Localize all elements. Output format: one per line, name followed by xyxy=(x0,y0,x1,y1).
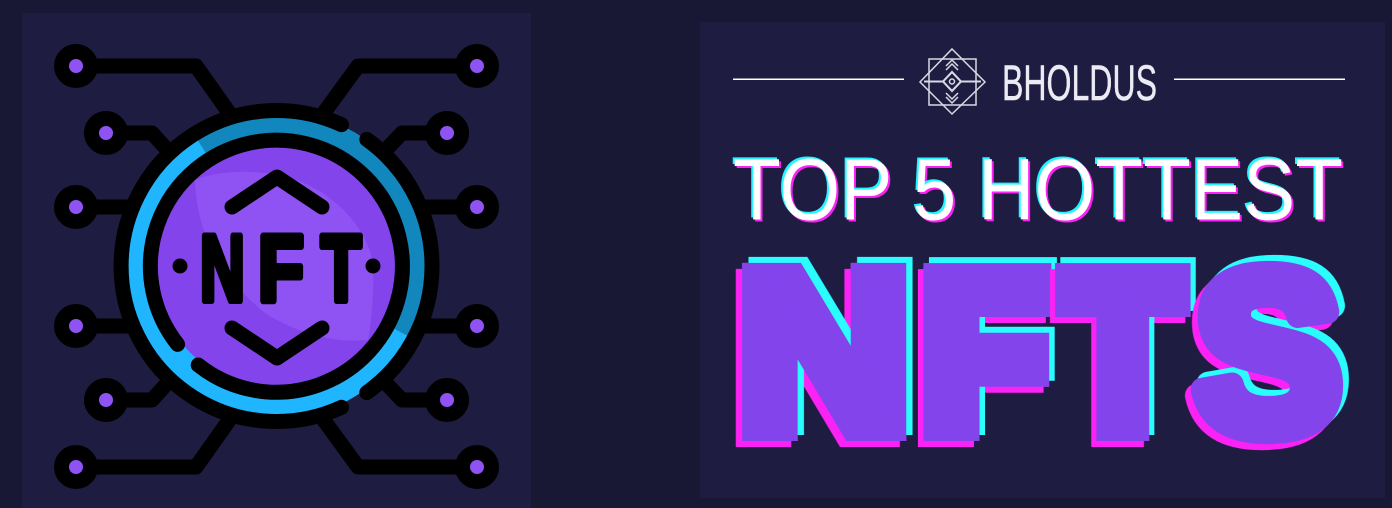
divider line left xyxy=(733,78,904,80)
heading: top 5 hottest: TOP 5 HOTTEST xyxy=(733,142,1343,238)
blue ring shaded part xyxy=(201,123,420,333)
circuit wires xyxy=(76,66,477,467)
brand name: BHOLDUS xyxy=(1002,55,1157,111)
letter N: N xyxy=(739,227,909,477)
panel: right title background xyxy=(700,22,1385,498)
outer ring right arc xyxy=(367,139,432,393)
icon lettering xyxy=(200,216,361,321)
icon lettering: N xyxy=(200,216,245,321)
chevrons xyxy=(232,177,322,358)
icon: NFT circuit coin xyxy=(62,52,492,482)
purple coin face xyxy=(154,144,398,388)
icon: Bholdus logo xyxy=(920,49,985,114)
letter T: T xyxy=(1066,231,1180,472)
icon lettering: F xyxy=(258,217,304,321)
dots xyxy=(172,258,188,274)
heading: NFTS xyxy=(739,226,1340,478)
coin highlight xyxy=(195,172,373,341)
letter S: S xyxy=(1196,226,1340,478)
panel: left icon background xyxy=(22,13,531,508)
blue ring xyxy=(124,114,428,418)
inner black ring xyxy=(150,140,402,392)
outer black ring xyxy=(121,110,341,421)
circuit nodes xyxy=(62,52,492,482)
letter F: F xyxy=(924,231,1045,472)
icon lettering: T xyxy=(321,217,361,321)
divider line right xyxy=(1174,78,1345,80)
